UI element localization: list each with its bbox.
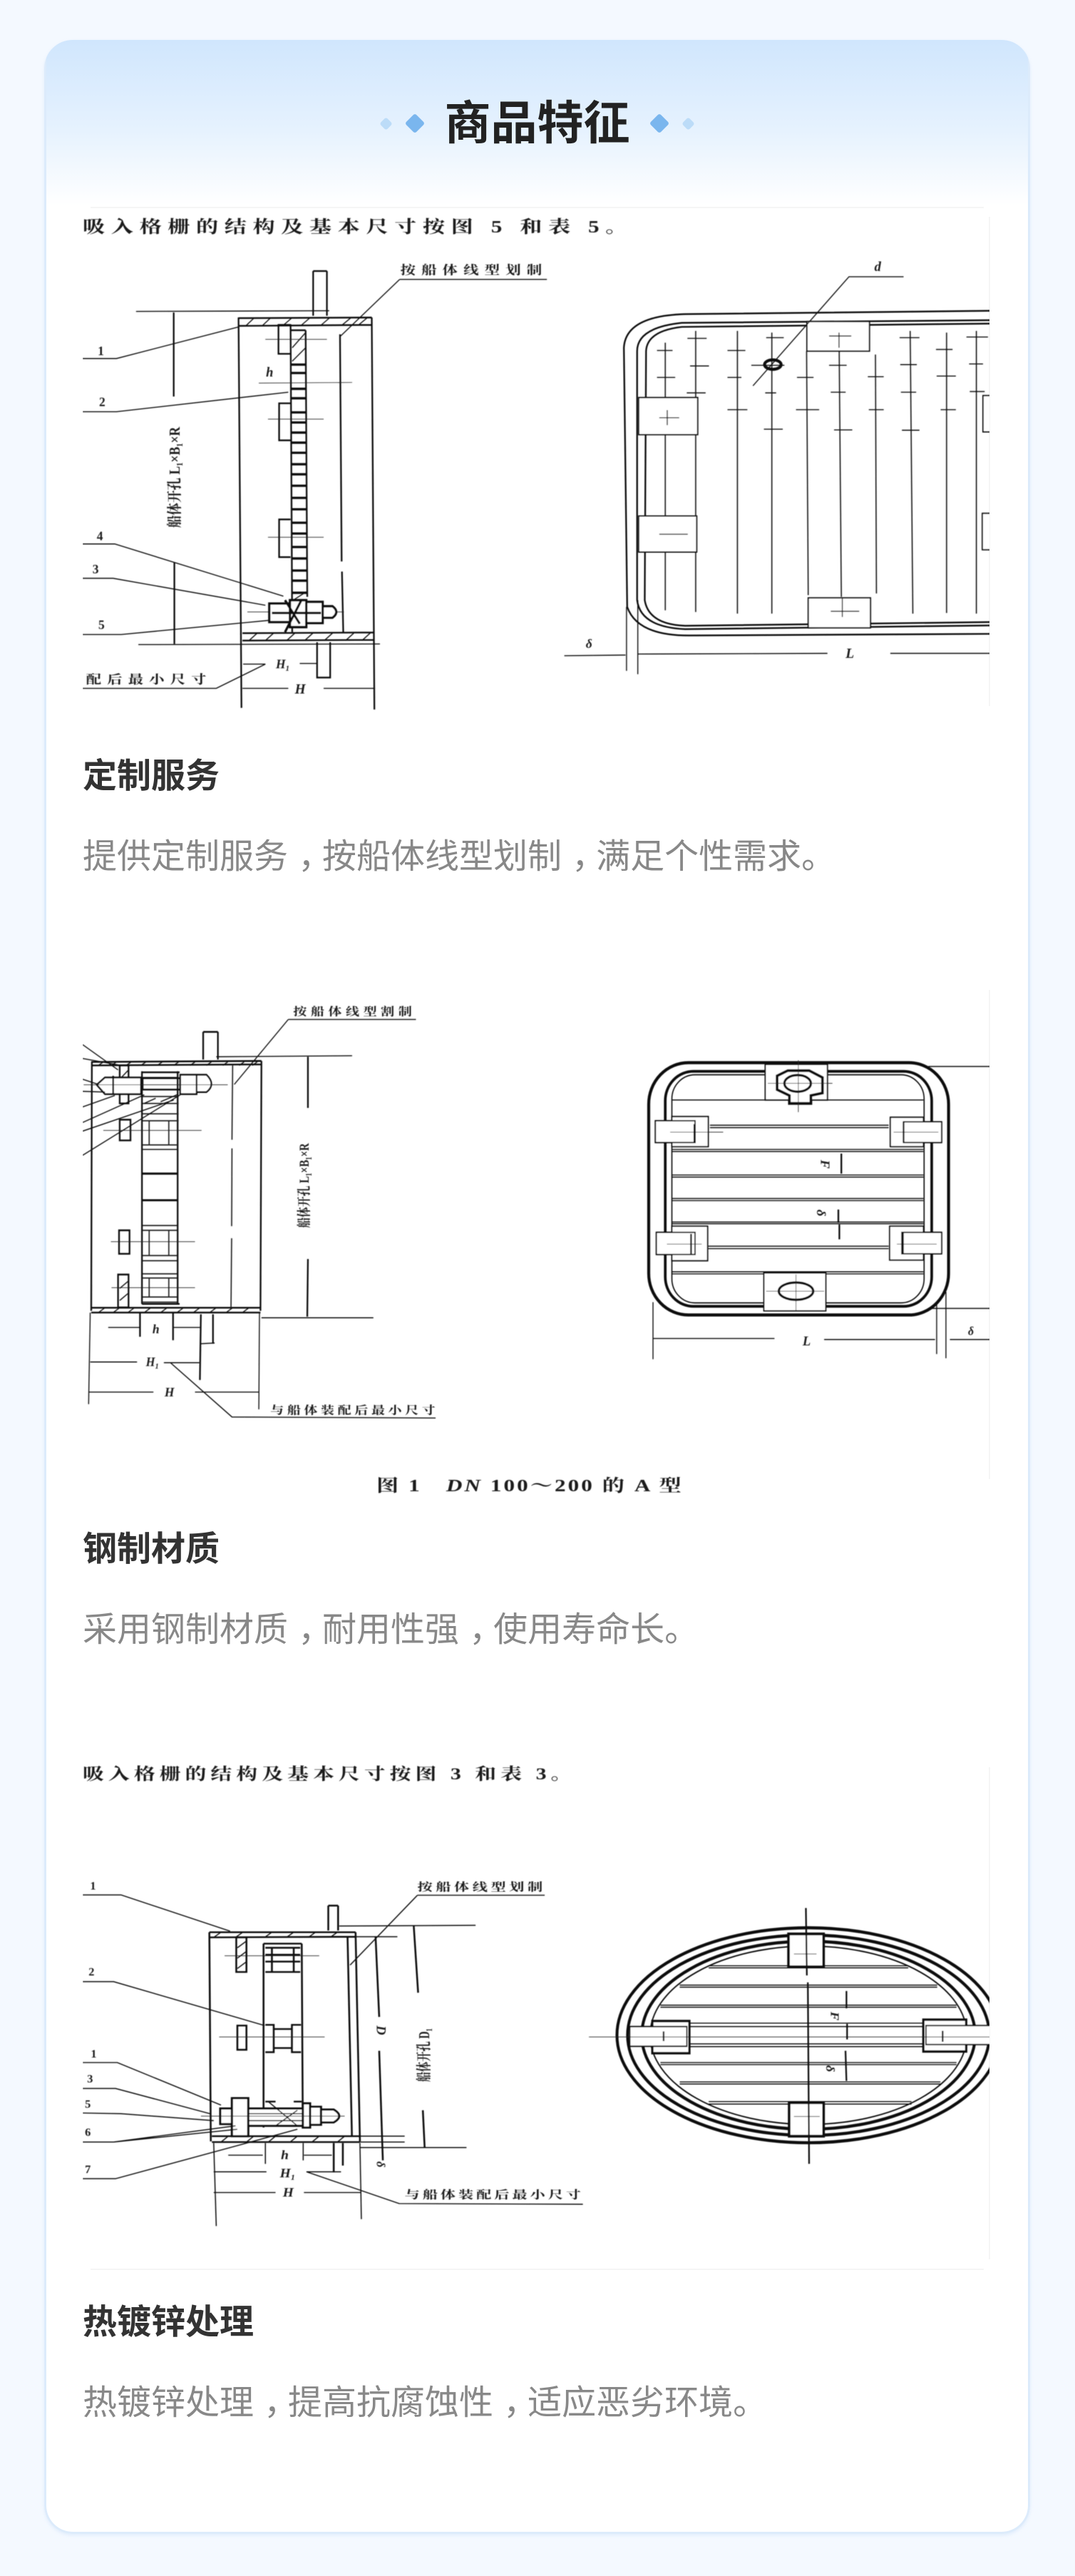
side section view: 与船体装配后最小尺寸: [405, 2189, 581, 2202]
side section view: 2: [99, 395, 106, 409]
side section view: H₁: [275, 657, 290, 671]
front view with grid lines: L: [845, 646, 854, 662]
image: rectangular grille drawing: [83, 217, 989, 710]
icon: right small diamond: [681, 117, 695, 131]
image: oval grille drawing: [83, 1764, 989, 2227]
side section view: δ: [374, 2162, 388, 2167]
side section view: 2: [88, 1966, 94, 1978]
front view with grid lines: δ: [586, 636, 592, 651]
side section view: 船体开孔 D₁: [415, 2028, 433, 2082]
side section view: 按船体线型划制: [418, 1881, 542, 1893]
front view oval grille: F: [828, 2011, 842, 2020]
panel: steel material: [83, 990, 990, 1649]
side section view: h: [281, 2148, 289, 2163]
panel: custom service: [83, 207, 990, 876]
drawing heading text: 吸入格栅的结构及基本尺寸按图 3 和表 3。: [83, 1764, 572, 1783]
heading: 钢制材质: [83, 1530, 220, 1568]
side section view: [83, 1005, 436, 1418]
side section view: H₁: [145, 1355, 159, 1369]
side section view: h: [266, 365, 273, 380]
side section view: 7: [85, 2164, 91, 2176]
side section view: H: [164, 1384, 175, 1399]
icon: right large diamond: [649, 113, 669, 133]
figure caption: 图 1 DN 100～200 的 A 型: [376, 1476, 681, 1496]
front view oval grille: [589, 1908, 1000, 2164]
front view with grid lines: [565, 260, 997, 674]
front view rounded grille: L: [802, 1334, 811, 1349]
side section view: H: [282, 2186, 294, 2200]
side section view: 船体开孔 L₁×B₁×R: [297, 1143, 312, 1228]
description: 热镀锌处理 ，提高抗腐蚀性 ，适应恶劣环境。: [83, 2384, 767, 2422]
title: 商品特征: [444, 97, 630, 149]
heading: 定制服务: [83, 757, 220, 795]
side section view: 与船体装配后最小尺寸: [270, 1404, 436, 1416]
front view rounded grille: [649, 1060, 993, 1359]
side section view: H: [294, 683, 306, 697]
side section view: 1: [91, 2048, 97, 2060]
side section view: 配后最小尺寸: [86, 673, 207, 687]
side section view: 6: [85, 2127, 91, 2139]
icon: left small diamond: [379, 117, 393, 131]
panel: hot-dip galvanizing: [83, 1764, 990, 2422]
side section view: 5: [98, 618, 105, 632]
side section view: 按船体线型划制: [400, 263, 542, 277]
description: 提供定制服务 ，按船体线型划制 ，满足个性需求。: [83, 838, 835, 876]
heading: 热镀锌处理: [83, 2304, 254, 2341]
side section view: D: [373, 2025, 389, 2035]
front view with grid lines: d: [875, 260, 882, 275]
description: 采用钢制材质 ，耐用性强 ，使用寿命长。: [83, 1611, 699, 1649]
icon: left large diamond: [405, 113, 425, 133]
side section view: 1: [98, 344, 104, 358]
front view rounded grille: δ: [814, 1210, 828, 1216]
side section view: 船体开孔 L₁×B₁×R: [166, 426, 183, 528]
side section view: [83, 263, 547, 710]
header band: [46, 40, 1028, 205]
side section view: h: [153, 1322, 160, 1336]
front view rounded grille: F: [818, 1159, 832, 1169]
side section view: 3: [87, 2073, 93, 2085]
drawing heading text: 吸入格栅的结构及基本尺寸按图 5 和表 5。: [83, 217, 627, 237]
front view rounded grille: δ: [968, 1326, 974, 1338]
side section view: 按船体线型割制: [293, 1005, 412, 1018]
side section view: 1: [90, 1881, 96, 1893]
front view oval grille: δ: [823, 2065, 837, 2072]
side section view: H₁: [279, 2166, 295, 2181]
image: type A grille drawing: [83, 1005, 989, 1496]
side section view: 3: [93, 562, 99, 576]
side section view: 5: [85, 2099, 91, 2110]
side section view: 4: [97, 528, 103, 543]
side section view: [83, 1881, 583, 2226]
